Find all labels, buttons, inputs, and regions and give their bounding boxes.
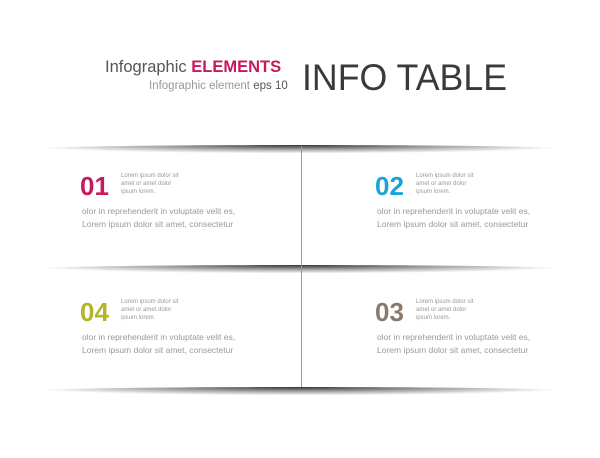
body text: Lorem ipsum dolor sit amet, consectetur: [377, 219, 528, 229]
small text: [416, 298, 474, 321]
body text: olor in reprehenderit in voluptate velit es,: [82, 206, 235, 216]
small text: Lorem ipsum dolor sit: [121, 299, 178, 305]
small text: amet or amet dolor: [121, 307, 171, 313]
subtitle: infographic elements: Infographic ELEMENTS: [105, 58, 281, 76]
number 02: 02: [375, 171, 404, 201]
body text: [377, 206, 530, 229]
number 04: 04: [80, 297, 109, 327]
small text: Lorem ipsum dolor sit: [121, 173, 178, 179]
body text: olor in reprehenderit in voluptate velit es,: [377, 206, 530, 216]
number 01: 01: [80, 171, 109, 201]
small text: amet or amet dolor: [121, 181, 171, 187]
body text: [82, 206, 235, 229]
number 03: 03: [375, 297, 404, 327]
small text: Lorem ipsum dolor sit: [416, 299, 473, 305]
small text: Lorem ipsum dolor sit: [416, 173, 473, 179]
small text: amet or amet dolor: [416, 307, 466, 313]
panel 01: [80, 171, 235, 229]
body text: [82, 332, 235, 355]
subtitle: eps: Infographic element eps 10: [149, 80, 288, 92]
body text: olor in reprehenderit in voluptate velit es,: [377, 332, 530, 342]
panel 04: [80, 297, 235, 355]
body text: olor in reprehenderit in voluptate velit es,: [82, 332, 235, 342]
heading: INFO TABLE: INFO TABLE: [302, 57, 507, 98]
small text: ipsum lorem.: [416, 189, 450, 195]
small text: ipsum lorem.: [121, 315, 155, 321]
panel 02: [375, 171, 530, 229]
small text: ipsum lorem.: [121, 189, 155, 195]
body text: [377, 332, 530, 355]
body text: Lorem ipsum dolor sit amet, consectetur: [82, 345, 233, 355]
panel 03: [375, 297, 530, 355]
small text: amet or amet dolor: [416, 181, 466, 187]
small text: [121, 172, 178, 195]
title block: [105, 57, 507, 98]
small text: [416, 172, 474, 195]
body text: Lorem ipsum dolor sit amet, consectetur: [377, 345, 528, 355]
small text: ipsum lorem.: [416, 315, 450, 321]
body text: Lorem ipsum dolor sit amet, consectetur: [82, 219, 233, 229]
small text: [121, 298, 178, 321]
